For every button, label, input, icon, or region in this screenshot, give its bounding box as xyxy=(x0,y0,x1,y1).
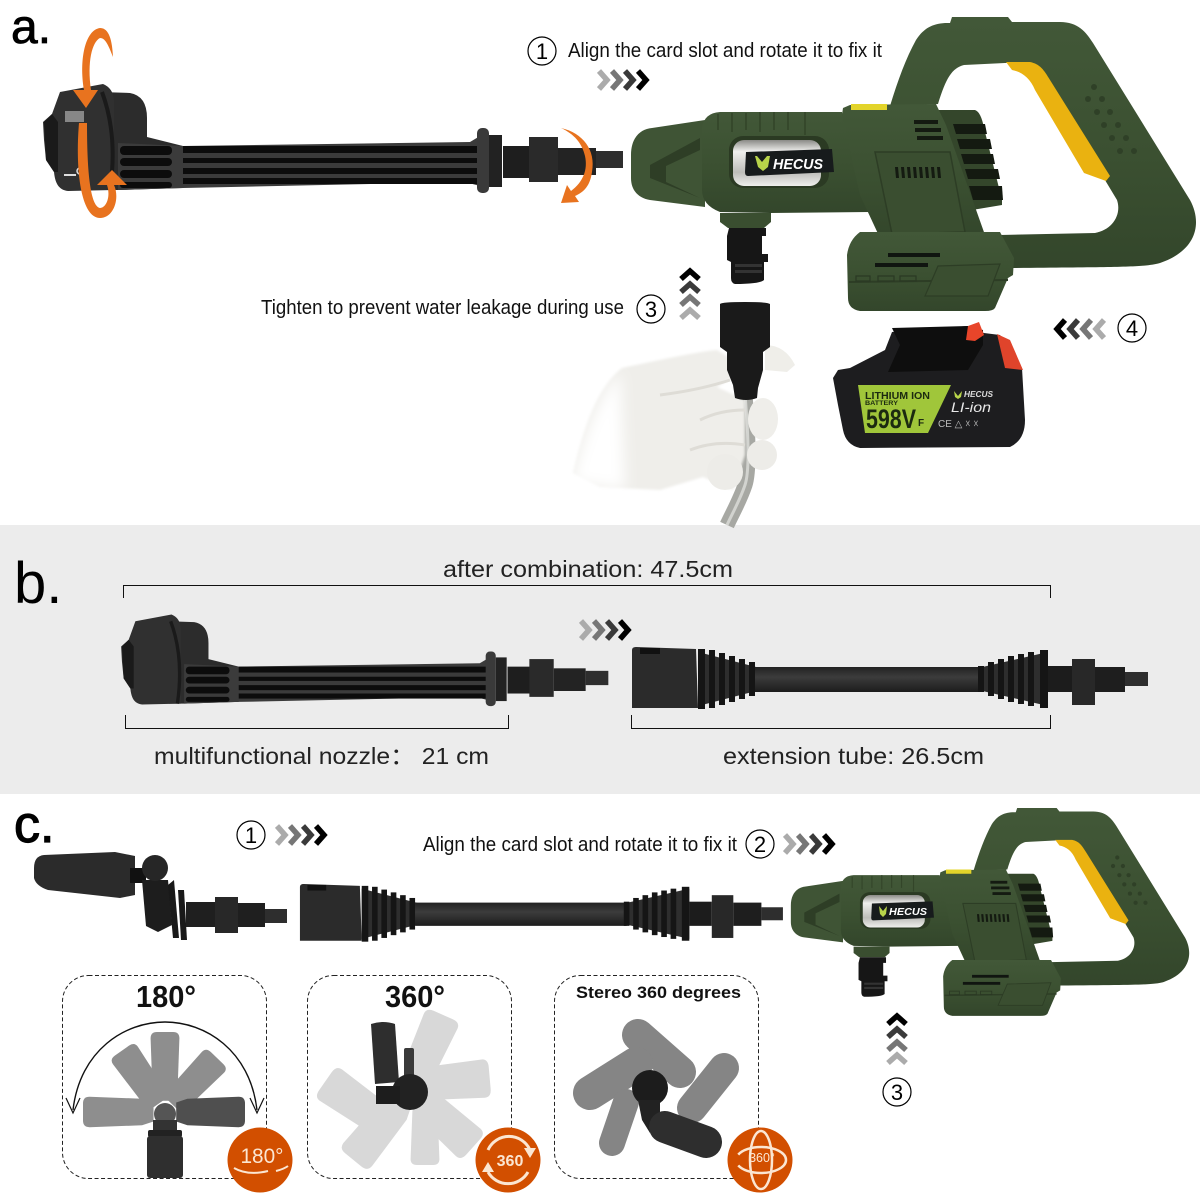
step 1 with chevrons: 1 xyxy=(245,823,257,848)
step 2 label with chevrons: 2 xyxy=(754,832,766,857)
icon: pressure washer gun, lower xyxy=(791,808,1189,1016)
step 2 label with chevrons: Align the card slot and rotate it to fix it xyxy=(423,834,737,856)
icon: battery pack: BATTERY xyxy=(865,400,899,407)
panel: 360 degree: 360° xyxy=(385,979,445,1014)
icon: battery pack: HECUS xyxy=(964,390,994,399)
panel: 180 degree: 180° xyxy=(136,979,196,1014)
badge: 360 degree: 360 xyxy=(497,1153,523,1170)
bracket: total length: after combination: 47.5cm xyxy=(443,556,733,582)
arrow: chevrons up with step 3 xyxy=(883,1016,911,1106)
icon: battery pack: F xyxy=(918,418,924,429)
step 3 label: 3 xyxy=(645,297,657,322)
icon: battery pack: CE △ ☓ ☓ xyxy=(938,419,979,430)
arrow: chevrons between nozzle and tube xyxy=(581,621,628,639)
heading: b.: b. xyxy=(14,551,62,616)
icon: battery pack: 598V xyxy=(866,404,916,434)
multifunctional nozzle xyxy=(121,615,608,706)
badge: 180 degree: 180° xyxy=(240,1145,284,1168)
icon: pressure washer gun xyxy=(631,17,1196,311)
icon: pressure washer gun, lower: HECUS xyxy=(889,907,927,918)
gray band: section b background xyxy=(0,525,1200,794)
heading: a.: a. xyxy=(11,1,51,54)
badge: stereo 360 degrees xyxy=(728,1128,792,1192)
badge: 180 degree xyxy=(228,1128,292,1192)
step 1 label: Align the card slot and rotate it to fix it xyxy=(568,40,882,62)
arrow: chevrons up with step 3: 3 xyxy=(891,1080,903,1105)
extension tube, assembly step xyxy=(300,884,783,942)
icon: battery pack: LITHIUM ION xyxy=(865,390,930,402)
panel: stereo 360 degrees xyxy=(554,976,758,1178)
panel: 180 degree xyxy=(62,976,266,1178)
badge: stereo 360 degrees: 360° xyxy=(749,1151,775,1165)
icon: elbow spray nozzle xyxy=(34,852,287,940)
step 1 label: 1 xyxy=(536,39,548,64)
step 2 label with chevrons xyxy=(423,830,832,858)
badge: 360 degree xyxy=(476,1128,540,1192)
step 4 label with chevrons: 4 xyxy=(1126,316,1138,341)
arrow: chevrons upward xyxy=(681,271,699,318)
nozzle length bracket and label xyxy=(126,715,508,769)
tube length bracket and label: extension tube: 26.5cm xyxy=(723,743,984,769)
step 1 with chevrons xyxy=(237,821,324,849)
icon: battery pack: LI-ion xyxy=(951,400,991,415)
icon: battery pack xyxy=(833,322,1025,448)
heading: c.: c. xyxy=(14,796,54,854)
extension tube xyxy=(632,647,1148,709)
nozzle length bracket and label: multifunctional nozzle： 21 cm xyxy=(154,743,489,769)
panel: stereo 360 degrees: Stereo 360 degrees xyxy=(576,983,741,1002)
icon: nozzle with orange rotation arrows xyxy=(43,28,623,218)
icon: gloved hand with hose connector xyxy=(572,302,795,525)
icon: pressure washer gun: HECUS xyxy=(773,156,823,173)
tube length bracket and label xyxy=(632,715,1050,769)
step 3 label: Tighten to prevent water leakage during use xyxy=(261,297,624,319)
panel: 360 degree xyxy=(308,976,512,1178)
bracket: total length xyxy=(124,556,1050,598)
arrow: chevrons toward gun xyxy=(599,71,646,89)
step 1 label xyxy=(528,37,882,65)
step 4 label with chevrons xyxy=(1057,314,1146,342)
